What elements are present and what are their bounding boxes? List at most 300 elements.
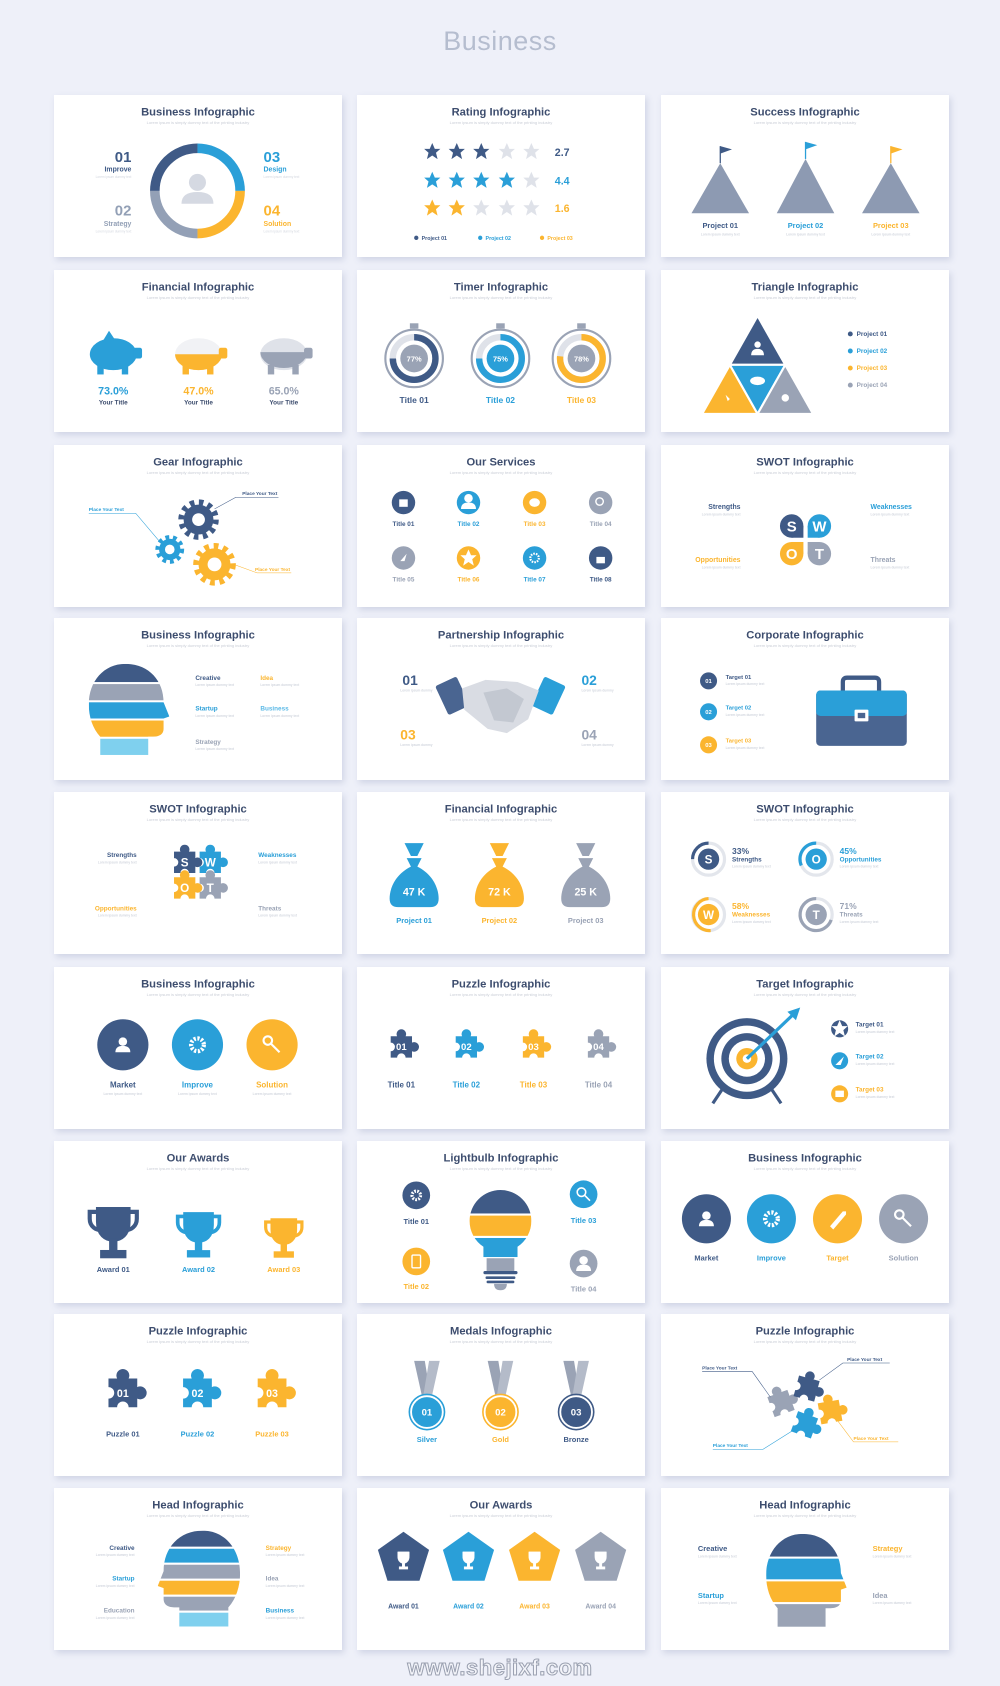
legend: Project 02 bbox=[857, 348, 888, 355]
labels: Startup bbox=[112, 1576, 135, 1583]
legend: Project 01 bbox=[422, 236, 447, 242]
panel: Our Awards trophies: Lorem ipsum is simply dummy text of the printing industry bbox=[147, 1166, 249, 1171]
icons: Title 02 bbox=[403, 1282, 429, 1291]
labels: Lorem ipsum dummy text bbox=[266, 1553, 305, 1557]
labels: Target bbox=[826, 1253, 849, 1262]
panel: Our Services: Lorem ipsum is simply dummy text of the printing industry bbox=[450, 470, 552, 475]
labels bbox=[96, 149, 299, 233]
labels: Improve bbox=[757, 1253, 786, 1262]
target list bbox=[831, 1020, 895, 1102]
labels: Bronze bbox=[564, 1435, 589, 1444]
gears bbox=[158, 503, 233, 582]
labels: Lorem ipsum dummy text bbox=[266, 1616, 305, 1620]
panel: Success Infographic bbox=[661, 95, 949, 257]
timers: 77% bbox=[407, 355, 422, 364]
rings: W bbox=[703, 909, 715, 922]
service icons bbox=[392, 491, 612, 570]
values bbox=[98, 386, 299, 406]
panel: SWOT Infographic puzzle bbox=[54, 792, 342, 954]
puzzle pieces bbox=[108, 1369, 296, 1407]
mountains with flags bbox=[691, 142, 920, 213]
puzzle pieces bbox=[391, 1029, 616, 1058]
panel: Puzzle Infographic three pieces bbox=[54, 1314, 342, 1476]
puzzle swot: W bbox=[205, 857, 217, 870]
puzzle swot: T bbox=[207, 882, 215, 895]
panel: Gear Infographic bbox=[54, 445, 342, 607]
labels: Lorem ipsum dummy text bbox=[701, 233, 741, 237]
labels: Opportunities bbox=[840, 856, 882, 863]
panel: Medals Infographic: Medals Infographic bbox=[450, 1325, 552, 1337]
labels: Title 03 bbox=[520, 1080, 548, 1089]
legend bbox=[848, 331, 888, 389]
labels: Award 04 bbox=[585, 1603, 616, 1610]
icons: Title 04 bbox=[571, 1284, 597, 1293]
labels: Title 08 bbox=[590, 576, 612, 583]
medals: 03 bbox=[571, 1407, 581, 1418]
values: 65.0% bbox=[269, 386, 299, 398]
legend: Project 02 bbox=[486, 236, 511, 242]
swot petals: S bbox=[787, 518, 797, 535]
values: Your Title bbox=[99, 399, 128, 406]
targets list: 03 bbox=[705, 743, 713, 749]
labels: Lorem ipsum dummy text bbox=[96, 1553, 136, 1557]
panel: Head Infographic right-facing: Lorem ipsum is simply dummy text of the printing industry bbox=[754, 1513, 856, 1518]
labels: Lorem ipsum dummy text bbox=[871, 512, 910, 516]
labels: Improve bbox=[182, 1080, 214, 1089]
panel: Financial Infographic bags bbox=[357, 792, 645, 954]
target list: Target 03 bbox=[856, 1087, 884, 1094]
labels bbox=[732, 846, 882, 924]
trophies bbox=[90, 1208, 302, 1258]
panel: Business Infographic donut: Business Infographic bbox=[141, 106, 255, 118]
money bags bbox=[390, 843, 610, 907]
panel: Financial Infographic bags: Lorem ipsum is simply dummy text of the printing industry bbox=[450, 817, 552, 822]
labels: Lorem ipsum dummy text bbox=[702, 512, 741, 516]
labels: Market bbox=[694, 1253, 719, 1262]
labels: 01 bbox=[115, 149, 131, 166]
puzzle cluster bbox=[765, 1369, 849, 1441]
panel: Medals Infographic: Lorem ipsum is simply dummy text of the printing industry bbox=[450, 1339, 552, 1344]
targets list: Target 02 bbox=[726, 706, 752, 712]
labels: Award 02 bbox=[453, 1603, 484, 1610]
puzzle pieces: 02 bbox=[461, 1042, 472, 1053]
head stripes bbox=[89, 664, 175, 755]
panel: Puzzle Infographic cluster: Lorem ipsum is simply dummy text of the printing industry bbox=[754, 1339, 856, 1344]
panel: Puzzle Infographic four pieces bbox=[357, 967, 645, 1129]
panel: Puzzle Infographic three pieces: Puzzle Infographic bbox=[149, 1325, 247, 1337]
targets list: Lorem ipsum dummy text bbox=[726, 746, 765, 750]
panel: Partnership Infographic: Partnership Infographic bbox=[438, 629, 564, 641]
puzzle pieces: 01 bbox=[117, 1388, 129, 1400]
panel: Financial Infographic bags: Financial Infographic bbox=[445, 803, 557, 815]
panel: Puzzle Infographic four pieces: Puzzle Infographic bbox=[452, 978, 550, 990]
labels bbox=[95, 852, 298, 918]
icons: Title 03 bbox=[571, 1216, 596, 1225]
panel: SWOT Infographic rings: Lorem ipsum is simply dummy text of the printing industry bbox=[754, 817, 856, 822]
labels: Puzzle 02 bbox=[181, 1430, 214, 1439]
labels: Title 06 bbox=[458, 576, 480, 583]
puzzle swot bbox=[174, 845, 228, 899]
labels: Startup bbox=[195, 706, 218, 713]
panel: Business Infographic four circles: Business Infographic bbox=[748, 1152, 862, 1164]
panel: Our Awards pentagons: Lorem ipsum is simply dummy text of the printing industry bbox=[450, 1513, 552, 1518]
labels: Strategy bbox=[266, 1545, 292, 1552]
labels: Lorem ipsum dummy text bbox=[732, 920, 772, 924]
legend: Project 03 bbox=[547, 236, 573, 242]
panel: Triangle Infographic: Triangle Infographic bbox=[752, 281, 858, 293]
labels: Puzzle 03 bbox=[255, 1430, 289, 1439]
panel: SWOT Infographic petals: Lorem ipsum is simply dummy text of the printing industry bbox=[754, 470, 856, 475]
icons: Title 01 bbox=[403, 1217, 429, 1226]
labels: 45% bbox=[840, 846, 857, 856]
labels: Idea bbox=[266, 1576, 279, 1583]
labels bbox=[698, 1544, 912, 1605]
pentagons bbox=[378, 1532, 626, 1581]
puzzle pieces: 02 bbox=[192, 1388, 203, 1400]
labels: Strategy bbox=[873, 1544, 903, 1553]
labels bbox=[393, 521, 612, 583]
numbers: Lorem ipsum dummy bbox=[400, 689, 433, 693]
panel: Our Services bbox=[357, 445, 645, 607]
targets list bbox=[700, 672, 765, 753]
targets list: Lorem ipsum dummy text bbox=[726, 713, 765, 717]
labels: Market bbox=[110, 1080, 136, 1089]
labels: Threats bbox=[871, 557, 896, 564]
panel: Head Infographic left-facing: Head Infographic bbox=[152, 1499, 244, 1511]
labels: Lorem ipsum dummy text bbox=[98, 914, 138, 918]
panel: Business Infographic circles: Lorem ipsum is simply dummy text of the printing industry bbox=[147, 992, 249, 997]
labels bbox=[103, 1080, 292, 1096]
panel: Rating Infographic bbox=[357, 95, 645, 257]
target list: Target 01 bbox=[856, 1022, 884, 1029]
labels: Project 02 bbox=[788, 221, 823, 230]
labels: Strategy bbox=[195, 739, 221, 746]
numbers: 03 bbox=[400, 727, 416, 743]
puzzle pieces: 01 bbox=[396, 1042, 407, 1053]
values: 47.0% bbox=[183, 386, 214, 398]
labels: Gold bbox=[492, 1435, 509, 1444]
panel: Business Infographic head: Business Infographic bbox=[141, 629, 255, 641]
rings: O bbox=[812, 853, 821, 866]
timers: 75% bbox=[493, 355, 508, 364]
labels: Lorem ipsum dummy text bbox=[178, 1092, 218, 1096]
labels: Threats bbox=[840, 912, 863, 919]
labels: Lorem ipsum dummy text bbox=[195, 714, 235, 718]
head stripes bbox=[152, 1531, 240, 1627]
labels: Lorem ipsum dummy text bbox=[258, 860, 298, 864]
panel: Puzzle Infographic cluster bbox=[661, 1314, 949, 1476]
panel: SWOT Infographic puzzle: Lorem ipsum is simply dummy text of the printing industry bbox=[147, 817, 249, 822]
panel: Gear Infographic: Lorem ipsum is simply dummy text of the printing industry bbox=[147, 470, 249, 475]
callouts: Place Your Text bbox=[713, 1443, 748, 1449]
labels: Creative bbox=[109, 1545, 135, 1552]
labels: Lorem ipsum dummy text bbox=[96, 175, 131, 179]
panel: SWOT Infographic rings bbox=[661, 792, 949, 954]
panel: Business Infographic head: Lorem ipsum is simply dummy text of the printing industry bbox=[147, 643, 249, 648]
legend: Project 03 bbox=[857, 365, 888, 372]
labels: Startup bbox=[698, 1591, 724, 1600]
panel: Puzzle Infographic three pieces: Lorem ipsum is simply dummy text of the printing industry bbox=[147, 1339, 249, 1344]
panel: Business Infographic circles bbox=[54, 967, 342, 1129]
puzzle pieces: 04 bbox=[593, 1042, 605, 1053]
labels: Idea bbox=[260, 675, 274, 682]
panel: Partnership Infographic: Lorem ipsum is simply dummy text of the printing industry bbox=[450, 643, 552, 648]
panel: Medals Infographic bbox=[357, 1314, 645, 1476]
labels bbox=[106, 1430, 289, 1439]
labels bbox=[96, 1545, 305, 1620]
numbers: Lorem ipsum dummy bbox=[400, 743, 433, 747]
labels: Creative bbox=[195, 675, 221, 682]
legend bbox=[414, 236, 573, 242]
money bags: 72 K bbox=[488, 886, 511, 898]
panel: Lightbulb Infographic: Lightbulb Infographic bbox=[444, 1152, 558, 1164]
star rows bbox=[424, 143, 570, 216]
labels bbox=[694, 1253, 919, 1262]
labels: Strengths bbox=[708, 504, 741, 511]
panel: Financial Infographic piggy banks: Lorem ipsum is simply dummy text of the printing industry bbox=[147, 295, 249, 300]
panel: Financial Infographic piggy banks: Financial Infographic bbox=[142, 281, 254, 293]
callouts: Place Your Text bbox=[853, 1436, 889, 1442]
labels: Lorem ipsum dummy text bbox=[840, 920, 879, 924]
labels: Title 07 bbox=[524, 576, 546, 583]
labels: Lorem ipsum dummy text bbox=[264, 175, 299, 179]
panel: Triangle Infographic bbox=[661, 270, 949, 432]
labels: Solution bbox=[256, 1080, 288, 1089]
panel: Our Awards pentagons bbox=[357, 1488, 645, 1650]
panel: Business Infographic four circles: Lorem ipsum is simply dummy text of the printing industry bbox=[754, 1166, 856, 1171]
labels: Lorem ipsum dummy text bbox=[266, 1584, 305, 1588]
panel: Corporate Infographic bbox=[661, 618, 949, 780]
labels bbox=[97, 1265, 300, 1274]
swot petals: W bbox=[812, 518, 827, 535]
labels bbox=[388, 1603, 616, 1610]
star rows: 2.7 bbox=[555, 147, 570, 159]
panel: Our Awards pentagons: Our Awards bbox=[470, 1499, 532, 1511]
target list: Target 02 bbox=[856, 1054, 884, 1061]
callouts: Place Your Text bbox=[242, 491, 278, 497]
labels: Design bbox=[264, 167, 287, 174]
labels: Lorem ipsum dummy text bbox=[258, 914, 298, 918]
panel: Lightbulb Infographic: Lorem ipsum is simply dummy text of the printing industry bbox=[450, 1166, 552, 1171]
labels: Title 04 bbox=[585, 1080, 613, 1089]
rings: T bbox=[813, 909, 821, 922]
target bbox=[706, 1008, 800, 1103]
targets list: 01 bbox=[705, 679, 713, 685]
values: Your Title bbox=[269, 399, 299, 406]
numbers bbox=[400, 672, 614, 747]
panel: Target Infographic: Lorem ipsum is simply dummy text of the printing industry bbox=[754, 992, 856, 997]
medals: 02 bbox=[495, 1407, 506, 1418]
labels: Lorem ipsum dummy text bbox=[786, 233, 826, 237]
labels: Business bbox=[266, 1608, 294, 1615]
labels: Title 01 bbox=[400, 395, 429, 405]
labels: 33% bbox=[732, 846, 749, 856]
labels: Title 03 bbox=[524, 521, 546, 528]
handshake bbox=[435, 676, 566, 733]
panel: Business Infographic donut: Lorem ipsum is simply dummy text of the printing industry bbox=[147, 120, 249, 125]
callouts: Place Your Text bbox=[847, 1357, 883, 1363]
labels: Lorem ipsum dummy text bbox=[96, 1616, 136, 1620]
panel: Timer Infographic bbox=[357, 270, 645, 432]
panel: Financial Infographic piggy banks bbox=[54, 270, 342, 432]
labels: Award 02 bbox=[182, 1265, 215, 1274]
labels: 02 bbox=[115, 202, 131, 219]
panel: Triangle Infographic: Lorem ipsum is simply dummy text of the printing industry bbox=[754, 295, 856, 300]
labels: Opportunities bbox=[95, 905, 137, 912]
swot petals: T bbox=[815, 546, 824, 563]
target list: Lorem ipsum dummy text bbox=[856, 1062, 895, 1066]
panel: SWOT Infographic rings: SWOT Infographic bbox=[756, 803, 854, 815]
labels: 04 bbox=[264, 202, 281, 219]
labels: Business bbox=[260, 706, 289, 713]
labels: Lorem ipsum dummy text bbox=[732, 865, 772, 869]
target list: Lorem ipsum dummy text bbox=[856, 1030, 895, 1034]
labels bbox=[701, 221, 911, 237]
labels: Improve bbox=[105, 167, 132, 174]
labels: Lorem ipsum dummy text bbox=[195, 747, 235, 751]
labels bbox=[417, 1435, 589, 1444]
labels: Title 02 bbox=[458, 521, 480, 528]
labels: Idea bbox=[873, 1591, 888, 1600]
labels: Lorem ipsum dummy text bbox=[698, 1554, 738, 1558]
labels: Award 01 bbox=[97, 1265, 130, 1274]
panel: Head Infographic right-facing bbox=[661, 1488, 949, 1650]
panel: Corporate Infographic: Lorem ipsum is simply dummy text of the printing industry bbox=[754, 643, 856, 648]
rings bbox=[693, 843, 832, 931]
labels: Lorem ipsum dummy text bbox=[103, 1092, 143, 1096]
labels: Title 01 bbox=[388, 1080, 416, 1089]
callouts: Place Your Text bbox=[255, 567, 291, 573]
labels: Lorem ipsum dummy text bbox=[702, 566, 741, 570]
labels: Lorem ipsum dummy text bbox=[698, 1601, 738, 1605]
labels: 03 bbox=[264, 149, 280, 166]
panel: Our Services: Our Services bbox=[466, 456, 536, 468]
legend: Project 01 bbox=[857, 331, 888, 338]
labels bbox=[695, 504, 912, 570]
labels: Award 03 bbox=[267, 1265, 300, 1274]
labels: Strategy bbox=[104, 221, 132, 228]
target list: Lorem ipsum dummy text bbox=[856, 1095, 895, 1099]
title: Business bbox=[443, 26, 557, 56]
labels: Opportunities bbox=[695, 557, 741, 564]
targets list: Target 01 bbox=[726, 675, 752, 681]
icon circles bbox=[682, 1194, 928, 1243]
callouts: Place Your Text bbox=[702, 1365, 738, 1371]
panel: Rating Infographic: Lorem ipsum is simply dummy text of the printing industry bbox=[450, 120, 552, 125]
panel: Gear Infographic: Gear Infographic bbox=[153, 456, 243, 468]
money bags: 25 K bbox=[574, 886, 597, 898]
labels: Puzzle 01 bbox=[106, 1430, 140, 1439]
callouts bbox=[702, 1357, 898, 1449]
numbers: Lorem ipsum dummy bbox=[581, 743, 614, 747]
panel: Our Awards trophies bbox=[54, 1141, 342, 1303]
triangle bbox=[702, 316, 813, 414]
labels: Lorem ipsum dummy text bbox=[871, 233, 911, 237]
labels: Lorem ipsum dummy text bbox=[264, 229, 299, 233]
labels bbox=[195, 675, 300, 751]
labels: Lorem ipsum dummy text bbox=[260, 683, 300, 687]
labels: Weaknesses bbox=[871, 504, 912, 511]
panel: Our Awards trophies: Our Awards bbox=[167, 1152, 229, 1164]
panel: Success Infographic: Success Infographic bbox=[750, 106, 860, 118]
timers bbox=[385, 323, 610, 387]
targets list: Target 03 bbox=[726, 739, 752, 745]
labels: Lorem ipsum dummy text bbox=[260, 714, 300, 718]
labels: Title 02 bbox=[486, 395, 515, 405]
panel: Rating Infographic: Rating Infographic bbox=[452, 106, 550, 118]
labels: Lorem ipsum dummy text bbox=[871, 566, 910, 570]
panel: Partnership Infographic bbox=[357, 618, 645, 780]
labels: Project 01 bbox=[702, 221, 738, 230]
panel: Puzzle Infographic four pieces: Lorem ipsum is simply dummy text of the printing industry bbox=[450, 992, 552, 997]
labels bbox=[396, 916, 604, 925]
puzzle swot: O bbox=[180, 882, 189, 895]
labels: Creative bbox=[698, 1544, 727, 1553]
panel: Business Infographic four circles bbox=[661, 1141, 949, 1303]
labels: Lorem ipsum dummy text bbox=[195, 683, 235, 687]
rings: S bbox=[705, 853, 713, 866]
labels bbox=[400, 395, 596, 405]
legend: Project 04 bbox=[857, 382, 888, 389]
labels: Title 05 bbox=[393, 576, 415, 583]
panel: Timer Infographic: Timer Infographic bbox=[454, 281, 548, 293]
labels: Project 01 bbox=[396, 916, 432, 925]
panel: Business Infographic head bbox=[54, 618, 342, 780]
labels: Title 01 bbox=[393, 521, 415, 528]
labels: Threats bbox=[258, 905, 282, 912]
panel: SWOT Infographic petals bbox=[661, 445, 949, 607]
numbers: 01 bbox=[402, 672, 418, 688]
icon circles bbox=[97, 1019, 298, 1070]
medals: 01 bbox=[422, 1407, 433, 1418]
labels: Lorem ipsum dummy text bbox=[873, 1601, 912, 1605]
labels: Silver bbox=[417, 1435, 437, 1444]
panel: Lightbulb Infographic bbox=[357, 1141, 645, 1303]
labels: Lorem ipsum dummy text bbox=[840, 865, 879, 869]
bulb bbox=[468, 1189, 532, 1290]
labels: Weaknesses bbox=[732, 912, 771, 919]
swot petals: O bbox=[786, 546, 797, 563]
labels: Lorem ipsum dummy text bbox=[873, 1554, 912, 1558]
panel: SWOT Infographic petals: SWOT Infographic bbox=[756, 456, 854, 468]
panel: Puzzle Infographic cluster: Puzzle Infographic bbox=[756, 1325, 854, 1337]
labels: Title 04 bbox=[590, 521, 612, 528]
star rows: 4.4 bbox=[555, 176, 570, 188]
panel: Business Infographic circles: Business Infographic bbox=[141, 978, 255, 990]
donut chart bbox=[155, 148, 240, 234]
numbers: 02 bbox=[581, 672, 597, 688]
callouts bbox=[89, 491, 291, 573]
panel: Head Infographic left-facing bbox=[54, 1488, 342, 1650]
medals bbox=[409, 1361, 594, 1430]
callouts: Place Your Text bbox=[89, 507, 124, 513]
puzzle pieces: 03 bbox=[528, 1042, 539, 1053]
labels: Title 02 bbox=[453, 1080, 481, 1089]
numbers: 04 bbox=[581, 727, 597, 743]
panel: Corporate Infographic: Corporate Infographic bbox=[746, 629, 864, 641]
targets list: 02 bbox=[705, 710, 713, 716]
star rows: 1.6 bbox=[555, 203, 570, 215]
labels: Project 02 bbox=[482, 916, 517, 925]
panel: SWOT Infographic puzzle: SWOT Infographic bbox=[149, 803, 247, 815]
numbers: Lorem ipsum dummy bbox=[581, 689, 614, 693]
labels: Strengths bbox=[107, 852, 137, 859]
targets list: Lorem ipsum dummy text bbox=[726, 682, 765, 686]
piggy banks bbox=[90, 331, 313, 374]
labels: Award 01 bbox=[388, 1603, 419, 1610]
labels: Lorem ipsum dummy text bbox=[96, 229, 131, 233]
labels: Lorem ipsum dummy text bbox=[96, 1584, 136, 1588]
